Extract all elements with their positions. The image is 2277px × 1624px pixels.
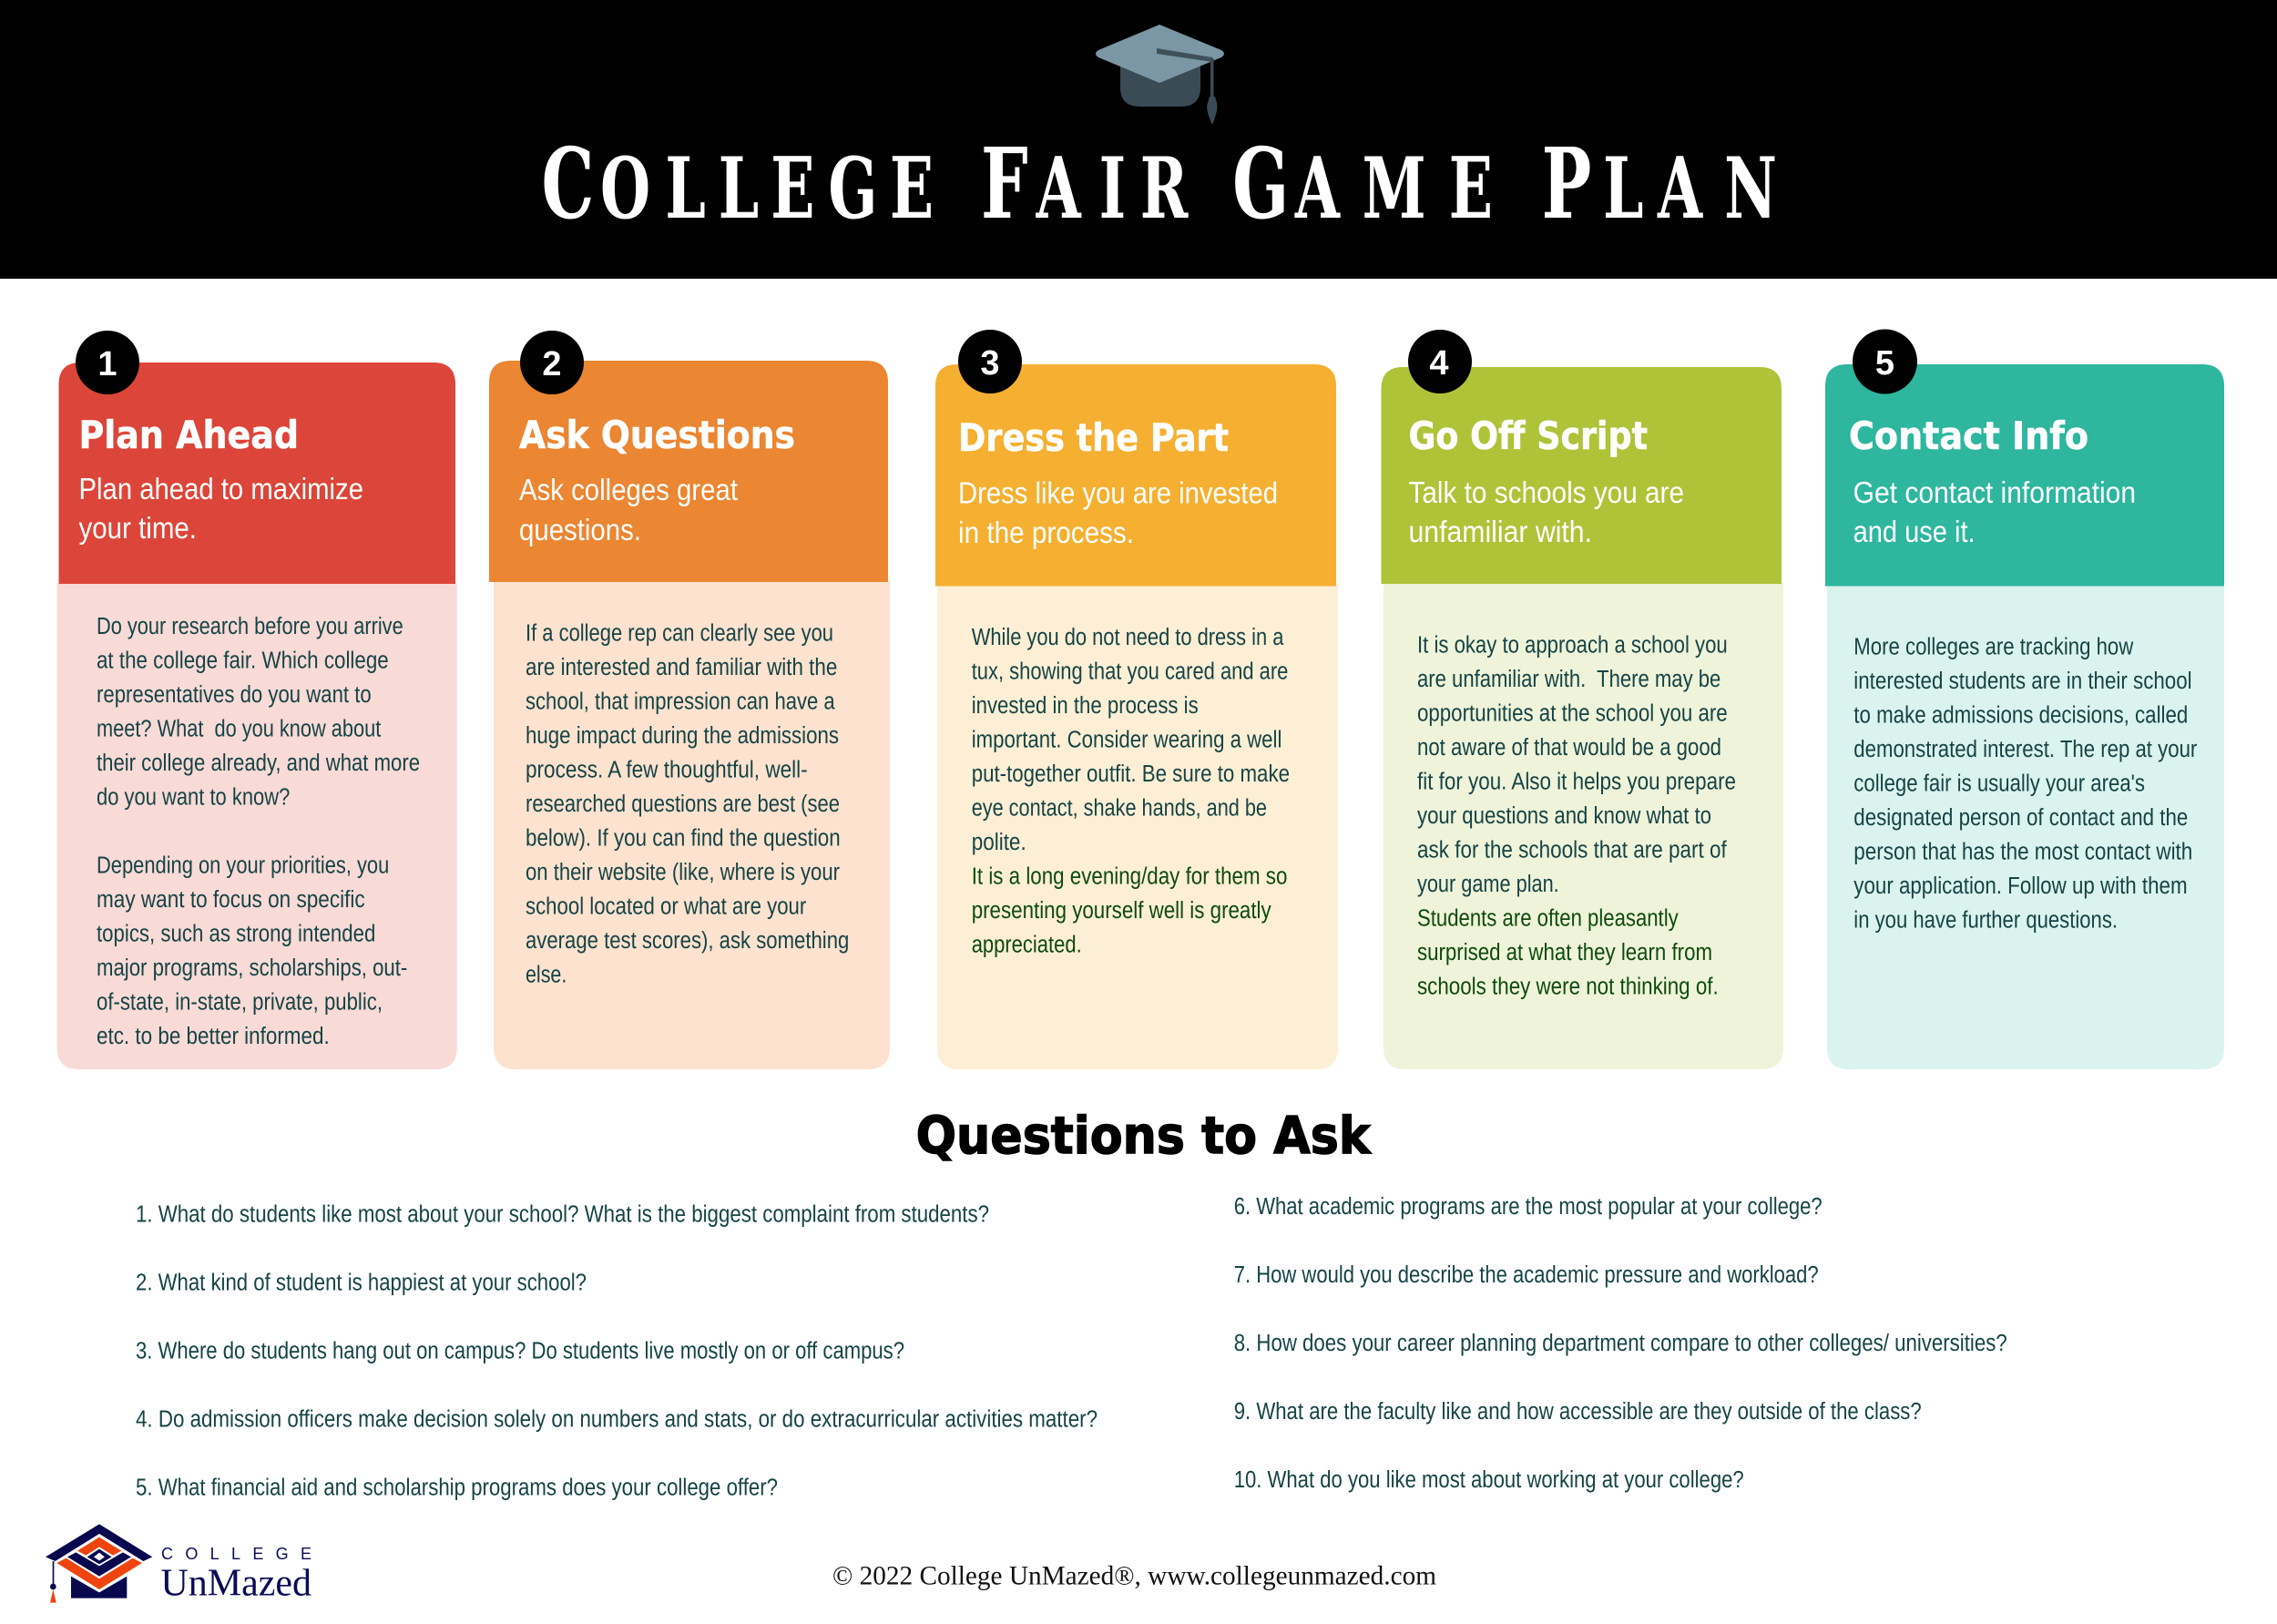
subheading: in the process. [958,516,1134,549]
number badge 1 [76,331,139,394]
body text: tux, showing that you cared and are [972,659,1288,685]
number badge 1: 1 [97,345,117,383]
question list right: 9. What are the faculty like and how accessible are they outside of the class? [1234,1399,1922,1425]
body text: topics, such as strong intended [97,921,375,946]
panel: step 4 go off script [1381,330,1783,1069]
heading: Go Off Script [1408,414,1648,458]
body text: on their website (like, where is your [526,860,840,885]
body text: polite. [972,830,1026,855]
body text: researched questions are best (see [526,792,840,817]
number badge 4: 4 [1429,344,1449,383]
body text: demonstrated interest. The rep at your [1853,737,2198,762]
question list left: 3. Where do students hang out on campus? Do students live mostly on or off campus? [136,1339,904,1364]
body text: It is okay to approach a school you [1417,632,1728,658]
heading: Dress the Part [958,415,1229,460]
body text: invested in the process is [972,693,1199,719]
body text: do you want to know? [97,784,290,810]
body text: to make admissions decisions, called [1853,703,2188,729]
body text: of-state, in-state, private, public, [97,989,383,1015]
heading: questions to ask: Questions to Ask [916,1107,1372,1166]
subheading [1408,475,1684,548]
body text: Depending on your priorities, you [97,853,389,878]
subheading [78,472,363,545]
subheading [958,475,1278,549]
subheading [1853,475,2136,548]
panel: step 1 plan ahead [57,331,457,1069]
subheading: unfamiliar with. [1408,515,1592,548]
title: AIR [1036,138,1189,238]
number badge 2 [520,331,584,394]
body text: school, that impression can have a [526,689,835,715]
body text: If a college rep can clearly see you [526,621,833,647]
body text: eye contact, shake hands, and be [972,796,1267,822]
body text: meet? What do you know about [97,716,381,741]
number badge 5 [1853,330,1917,393]
body text: More colleges are tracking how [1853,634,2134,659]
body text: designated person of contact and the [1853,805,2188,831]
question list left: 5. What financial aid and scholarship programs does your college offer? [136,1476,778,1501]
body text: in you have further questions. [1853,907,2118,933]
body text: process. A few thoughtful, well- [526,758,808,783]
body text: college fair is usually your area's [1853,771,2145,796]
number badge 3: 3 [980,344,1000,383]
question list right: 7. How would you describe the academic pressure and workload? [1234,1262,1819,1288]
body text: else. [526,963,567,988]
title: OLLEGE [600,138,934,238]
body text: important. Consider wearing a well [972,728,1281,753]
title: AME [1294,138,1493,238]
body text: interested students are in their school [1853,669,2192,694]
body text: huge impact during the admissions [526,723,839,749]
subheading: Get contact information [1853,475,2136,509]
body text [97,614,420,1049]
number badge 5: 5 [1875,344,1894,383]
body text: opportunities at the school you are [1417,700,1728,726]
body text: are unfamiliar with. There may be [1417,667,1721,692]
body text: appreciated. [972,933,1082,958]
subheading: Plan ahead to maximize [78,472,363,506]
question list right: 8. How does your career planning department compare to other colleges/ universities? [1234,1331,2007,1356]
body text [526,621,849,988]
body text: your game plan. [1417,872,1559,897]
subheading: Talk to schools you are [1408,475,1684,509]
body text: your application. Follow up with them [1853,873,2188,899]
title: P [1542,126,1591,241]
subheading [519,473,738,546]
body text: not aware of that would be a good [1417,735,1721,761]
logo wordmark: COLLEGE [161,1545,311,1563]
header banner [0,0,2277,279]
body text [972,625,1290,958]
footer copyright: © 2022 College UnMazed®, www.collegeunmazed.com [832,1561,1436,1590]
body text: Students are often pleasantly [1417,905,1679,931]
body text: representatives do you want to [97,682,372,708]
question list right [1234,1194,2007,1493]
body text: It is a long evening/day for them so [972,864,1287,890]
question list left: 2. What kind of student is happiest at your school? [136,1271,587,1296]
question list right: 6. What academic programs are the most popular at your college? [1234,1194,1823,1220]
body text: are interested and familiar with the [526,655,837,680]
body text: surprised at what they learn from [1417,940,1712,965]
body text: presenting yourself well is greatly [972,898,1271,924]
title: LAN [1603,138,1777,238]
heading: Plan Ahead [78,413,299,457]
question list left [136,1202,1098,1501]
body text [1417,632,1736,999]
title: C [541,126,594,241]
body text: etc. to be better informed. [97,1024,330,1049]
logo: College UnMazed: UnMazed [160,1563,311,1605]
body text: fit for you. Also it helps you prepare [1417,769,1736,794]
body text: person that has the most contact with [1853,840,2192,865]
question list left: 4. Do admission officers make decision solely on numbers and stats, or do extracurricular activities matter? [136,1407,1098,1433]
heading: Ask Questions [519,413,795,457]
body text [1853,634,2198,933]
number badge 2: 2 [542,345,562,383]
question list right: 10. What do you like most about working at your college? [1234,1467,1744,1493]
subheading: and use it. [1853,515,1976,548]
body text: put-together outfit. Be sure to make [972,761,1290,787]
panel: step 3 dress the part [935,330,1338,1069]
body text: may want to focus on specific [97,887,365,913]
panel: step 2 ask questions [489,331,890,1069]
number badge 3 [958,330,1022,393]
body text: ask for the schools that are part of [1417,837,1727,863]
question list left: 1. What do students like most about your school? What is the biggest complaint from students? [136,1202,989,1228]
title: F [981,126,1028,241]
logo: College UnMazed [46,1524,311,1605]
body text: Do your research before you arrive [97,614,403,639]
icon: logo cap [46,1524,152,1603]
icon: graduation cap [1096,25,1224,125]
number badge 4 [1408,330,1472,393]
subheading: your time. [78,511,197,545]
body text: at the college fair. Which college [97,648,389,673]
body text: their college already, and what more [97,751,420,776]
subheading: Ask colleges great [519,473,738,506]
body text: schools they were not thinking of. [1417,974,1719,999]
subheading: questions. [519,513,641,546]
heading: Contact Info [1849,414,2088,458]
body text: average test scores), ask something [526,928,849,954]
panel: step 5 contact info [1825,330,2224,1069]
body text: school located or what are your [526,894,807,920]
body text: major programs, scholarships, out- [97,955,407,981]
body text: below). If you can find the question [526,826,841,852]
body text: your questions and know what to [1417,803,1711,829]
title: G [1232,126,1289,241]
body text: While you do not need to dress in a [972,625,1284,650]
subheading: Dress like you are invested [958,475,1278,510]
